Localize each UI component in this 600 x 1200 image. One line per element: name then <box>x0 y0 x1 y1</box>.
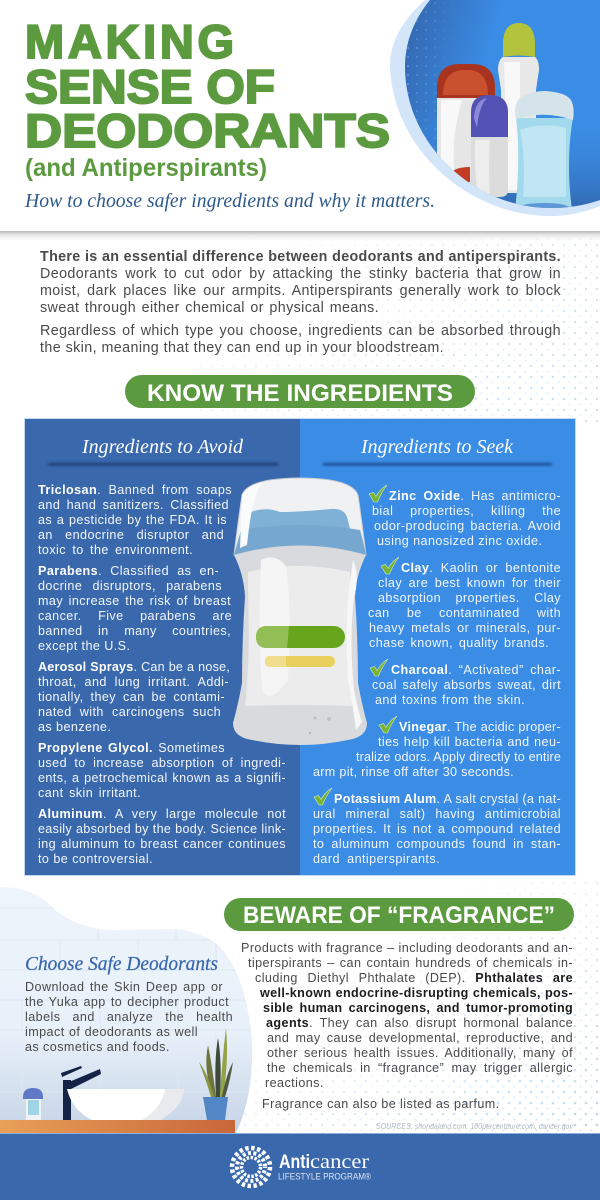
zinc oxide: odor-producing bacteria. Avoid <box>374 519 561 533</box>
red stick <box>437 64 495 200</box>
text: fragrance details <box>241 941 573 1111</box>
potassium alum: Potassium Alum. A salt crystal (a nat- <box>334 792 561 806</box>
illustration: deodorant stick <box>233 478 367 745</box>
vinegar: ties help kill bacteria and neu- <box>378 735 561 749</box>
text: fragrance details: reactions. <box>265 1076 324 1090</box>
triclosan: as a pesticide by the FDA. It is <box>38 513 227 527</box>
title: (and Antiperspirants) <box>25 154 267 182</box>
text: fragrance details: Fragrance can also be listed as parfum. <box>262 1097 500 1111</box>
text: fragrance details: sible human carcinogens, and tumor-promoting <box>263 1001 573 1015</box>
triclosan: Triclosan. Banned from soaps <box>38 483 232 497</box>
text: choose safe deodorants <box>25 980 233 1054</box>
tall green cap bottle <box>498 23 539 193</box>
triclosan: toxic to the environment. <box>38 543 193 557</box>
wordmark <box>278 1152 371 1182</box>
propylene glycol: used to increase absorption of ingredi- <box>38 756 286 770</box>
wordmark: cancer <box>310 1152 370 1173</box>
clay: clay are best known for their <box>378 576 561 590</box>
icon: anticancer burst <box>232 1148 270 1186</box>
triclosan: and hand sanitizers. Classified <box>38 498 229 512</box>
panel frame <box>24 418 576 876</box>
counter <box>0 1120 235 1133</box>
aluminum: easily absorbed by the body. Science link- <box>38 822 286 836</box>
propylene glycol: cant skin irritant. <box>38 786 141 800</box>
intro text <box>40 249 561 356</box>
vinegar: Vinegar. The acidic proper- <box>399 720 561 734</box>
panel headings: Ingredients to Seek <box>360 436 514 458</box>
propylene glycol: ents, a petrochemical known as a signifi- <box>38 771 286 785</box>
text: ingredients to avoid <box>38 483 286 866</box>
potassium alum: ural mineral salt) having antimicrobial <box>313 807 561 821</box>
clay: absorption properties. Clay <box>378 591 561 605</box>
footer band <box>0 1133 600 1200</box>
clay: Clay. Kaolin or bentonite <box>401 561 561 575</box>
zinc oxide: using nanosized zinc oxide. <box>377 534 542 548</box>
aluminum: Aluminum. A very large molecule not <box>38 807 286 821</box>
aluminum <box>38 807 286 866</box>
background dot pattern <box>200 238 598 1132</box>
potassium alum: properties. It is not a compound related <box>313 822 561 836</box>
clay: heavy metals or minerals, pur- <box>369 621 561 635</box>
header illustration: deodorant products in circle <box>390 0 600 216</box>
heading pill: beware of fragrance: BEWARE OF “FRAGRANCE” <box>243 902 555 929</box>
text: fragrance details: tiperspirants – can contain hundreds of chemicals in- <box>248 956 573 970</box>
aerosol sprays: throat, and lung irritant. Addi- <box>38 675 229 689</box>
triclosan <box>38 483 232 557</box>
text: fragrance details: agents. They can also disrupt hormonal balance <box>266 1016 573 1030</box>
parabens: cancer. Five parabens are <box>38 609 232 623</box>
text: choose safe deodorants: as cosmetics and foods. <box>25 1040 170 1054</box>
aerosol sprays <box>38 660 230 734</box>
vinegar <box>313 720 561 779</box>
text: fragrance details: other serious health issues. Additionally, many of <box>267 1046 573 1060</box>
panel: ingredients to avoid <box>25 419 300 875</box>
heading pill: know the ingredients: KNOW THE INGREDIENTS <box>147 380 453 407</box>
aerosol sprays: Aerosol Sprays. Can be a nose, <box>38 660 230 674</box>
potassium alum: dard antiperspirants. <box>313 852 440 866</box>
parabens <box>38 564 232 653</box>
parabens: except the U.S. <box>38 639 130 653</box>
parabens: banned in many countries, <box>38 624 231 638</box>
parabens: Parabens. Classified as en- <box>38 564 219 578</box>
aluminum: to be controversial. <box>38 852 153 866</box>
intro text: sweat through either chemical or physical means. <box>40 300 379 316</box>
icon: sink, faucet, plant and deodorant on counter <box>0 1028 235 1133</box>
title: SENSE OF <box>25 60 275 113</box>
intro text: moist, dark places like our armpits. Antiperspirants generally work to block <box>40 283 561 299</box>
parabens: docrine disruptors, parabens <box>38 579 222 593</box>
triclosan: an endocrine disruptor and <box>38 528 224 542</box>
purple roll-on <box>471 95 508 197</box>
clay: chase known, quality brands. <box>369 636 549 650</box>
small deodorant <box>23 1088 43 1120</box>
intro text: Regardless of which type you choose, ingredients can be absorbed through <box>40 323 561 339</box>
bathroom scene backdrop <box>0 887 252 1133</box>
charcoal: and toxins from the skin. <box>375 693 525 707</box>
plant <box>199 1028 233 1120</box>
basin <box>67 1089 184 1120</box>
faucet <box>61 1066 101 1120</box>
vinegar: arm pit, rinse off after 30 seconds. <box>313 765 514 779</box>
aerosol sprays: nated with carcinogens such <box>38 705 221 719</box>
title <box>25 20 390 182</box>
zinc oxide <box>372 489 561 548</box>
text: ingredients to seek <box>313 489 561 866</box>
footer logo <box>230 1146 371 1188</box>
potassium alum <box>313 792 561 866</box>
light blue stick <box>515 91 574 212</box>
aluminum: ing aluminum to breast cancer continues <box>38 837 286 851</box>
text: fragrance details: and may cause developmental, reproductive, and <box>267 1031 573 1045</box>
heading: choose safe deodorants: Choose Safe Deodorants <box>25 953 218 975</box>
vinegar: tralize odors. Apply directly to entire <box>356 750 561 764</box>
intro text: Deodorants work to cut odor by attacking the stinky bacteria that grow in <box>40 266 561 282</box>
header shadow band <box>0 231 600 241</box>
parabens: may increase the risk of breast <box>38 594 231 608</box>
zinc oxide: Zinc Oxide. Has antimicro- <box>389 489 561 503</box>
panel headings <box>47 436 554 467</box>
text: choose safe deodorants: labels and analyze the health <box>25 1010 233 1024</box>
text: choose safe deodorants: Download the Skin Deep app or <box>25 980 223 994</box>
charcoal: coal safely absorbs sweat, dirt <box>372 678 561 692</box>
aerosol sprays: tionally, they can be contami- <box>38 690 225 704</box>
text: fragrance details: Products with fragrance – including deodorants and an- <box>241 941 573 955</box>
potassium alum: to aluminum compounds found in stan- <box>313 837 561 851</box>
charcoal <box>372 663 561 707</box>
propylene glycol <box>38 741 286 800</box>
panel: ingredients to seek <box>300 419 575 875</box>
green check marks <box>314 484 400 806</box>
zinc oxide: bial properties, killing the <box>372 504 561 518</box>
subtitle: How to choose safer ingredients and why it matters. <box>24 190 435 212</box>
intro text: the skin, meaning that they can end up in your bloodstream. <box>40 340 444 356</box>
panel headings: Ingredients to Avoid <box>81 436 244 458</box>
text: choose safe deodorants: the Yuka app to decipher product <box>25 995 229 1009</box>
intro text: There is an essential difference between deodorants and antiperspirants. <box>40 249 561 265</box>
aerosol sprays: as benzene. <box>38 720 111 734</box>
charcoal: Charcoal. “Activated” char- <box>391 663 561 677</box>
clay <box>368 561 561 650</box>
text: fragrance details: well-known endocrine-disrupting chemicals, pos- <box>260 986 573 1000</box>
wordmark: Anti <box>279 1152 310 1173</box>
propylene glycol: Propylene Glycol. Sometimes <box>38 741 225 755</box>
clay: can be contaminated with <box>368 606 561 620</box>
text: choose safe deodorants: impact of deodorants as well <box>25 1025 198 1039</box>
text: fragrance details: cluding Diethyl Phthalate (DEP). Phthalates are <box>255 971 573 985</box>
text: fragrance details: the chemicals in “fragrance” may trigger allergic <box>267 1061 573 1075</box>
title: DEODORANTS <box>25 104 390 157</box>
